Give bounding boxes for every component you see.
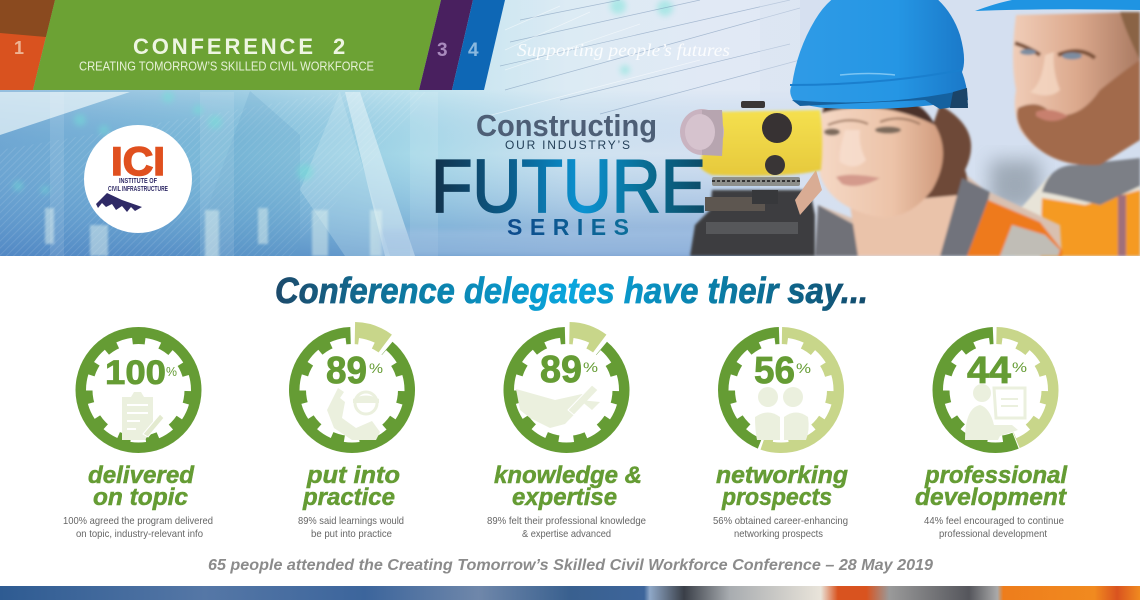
tagline: Supporting people’s futures xyxy=(517,40,730,60)
description: 100% agreed the program delivered xyxy=(63,515,213,527)
stat: networking prospects xyxy=(713,324,848,540)
gear ring 89 percent xyxy=(280,318,424,462)
label: put into xyxy=(306,462,400,489)
abstract building background xyxy=(0,0,1140,258)
label: on topic xyxy=(93,484,188,511)
series title: FUTURE xyxy=(431,144,706,228)
tab 3 purple xyxy=(419,0,473,90)
surveying instrument on tripod xyxy=(680,101,822,256)
stat: put into practice xyxy=(280,318,424,540)
label: development xyxy=(915,484,1067,511)
tab 1 orange xyxy=(0,0,55,90)
description: 89% felt their professional knowledge xyxy=(487,515,646,527)
gear ring 89 percent xyxy=(495,318,638,462)
series title: SERIES xyxy=(507,214,629,240)
tab 1 orange: 1 xyxy=(14,38,24,58)
man in hard hat xyxy=(975,0,1140,256)
icon: two workers xyxy=(755,387,809,440)
icon: person at computer xyxy=(965,384,1025,440)
value 56%: 56 xyxy=(754,350,795,392)
value 89%: 89 xyxy=(326,350,367,392)
label: professional xyxy=(924,462,1068,489)
series title: Constructing xyxy=(476,108,657,143)
icon: worker with hammer xyxy=(327,388,380,440)
icon: hand writing xyxy=(516,385,600,428)
description: be put into practice xyxy=(311,528,392,540)
description xyxy=(713,515,848,540)
label: knowledge & xyxy=(494,462,642,489)
label: expertise xyxy=(512,484,617,511)
heading: Conference delegates have their say... xyxy=(275,270,868,311)
label: delivered xyxy=(88,462,195,489)
tab 2 green conference: 2 xyxy=(333,34,345,59)
ICI logo: ICI xyxy=(111,140,165,184)
value 89%: 89 xyxy=(540,349,582,391)
series title: OUR INDUSTRY’S xyxy=(505,138,630,152)
label xyxy=(88,462,195,511)
stat: delivered on topic xyxy=(63,327,213,540)
label xyxy=(302,462,400,511)
description: 44% feel encouraged to continue xyxy=(924,515,1064,527)
gear ring 56 percent xyxy=(715,324,847,456)
stat: knowledge and expertise xyxy=(487,318,646,540)
footer photo strip xyxy=(0,586,1140,600)
gear ring 100 percent xyxy=(76,327,202,453)
tab 4 blue: 4 xyxy=(468,40,479,61)
value 44%: % xyxy=(1012,359,1027,375)
panel: header banner photo xyxy=(0,0,1140,258)
ICI logo xyxy=(84,125,192,233)
label xyxy=(716,462,848,511)
description xyxy=(63,515,213,540)
icon: clipboard xyxy=(122,392,164,440)
value 100%: 100 xyxy=(105,354,166,392)
description: & expertise advanced xyxy=(522,528,611,540)
value 56%: % xyxy=(796,360,811,376)
woman with hard hat xyxy=(790,0,1062,256)
value 44%: 44 xyxy=(967,350,1011,392)
description: 56% obtained career-enhancing xyxy=(713,515,848,527)
description: 89% said learnings would xyxy=(298,515,404,527)
value 89%: % xyxy=(369,360,383,376)
label: practice xyxy=(302,484,395,511)
description xyxy=(298,515,404,540)
attendance note: 65 people attended the Creating Tomorrow’s Skilled Civil Workforce Conference – 28 May 2019 xyxy=(208,557,933,574)
label: prospects xyxy=(721,484,832,511)
tab 2 green conference: CREATING TOMORROW’S SKILLED CIVIL WORKFORCE xyxy=(79,58,374,74)
tab 4 blue xyxy=(452,0,505,90)
tab 2 green conference: CONFERENCE xyxy=(133,34,313,59)
gear ring 44 percent xyxy=(929,324,1062,456)
tab 3 purple: 3 xyxy=(437,40,448,61)
label xyxy=(915,462,1068,511)
series title xyxy=(431,108,706,240)
description xyxy=(924,515,1064,540)
description: on topic, industry-relevant info xyxy=(76,528,203,540)
description xyxy=(487,515,646,540)
label: networking xyxy=(716,462,848,489)
tab 2 green conference xyxy=(33,0,441,90)
stat: professional development xyxy=(915,324,1068,540)
label xyxy=(494,462,642,511)
description: professional development xyxy=(939,528,1047,540)
value 100%: % xyxy=(166,364,177,379)
value 89%: % xyxy=(583,359,598,375)
ICI logo: CIVIL INFRASTRUCTURE xyxy=(108,186,168,193)
ICI logo: INSTITUTE OF xyxy=(119,178,158,185)
description: networking prospects xyxy=(734,528,823,540)
